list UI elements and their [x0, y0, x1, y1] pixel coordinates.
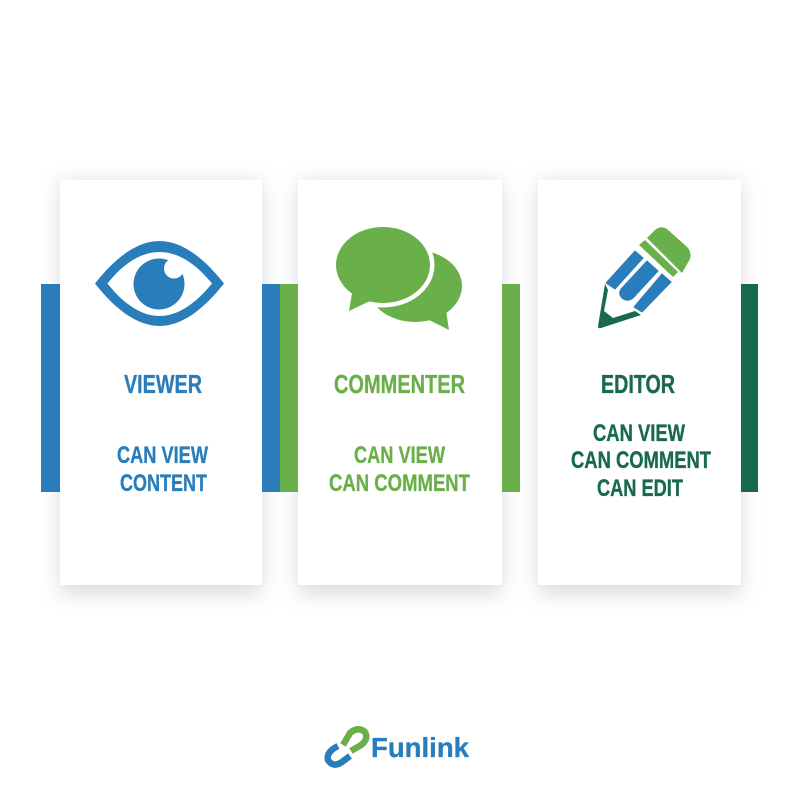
ribbon: viewer bar — [41, 284, 280, 492]
text: viewer permissions — [117, 442, 208, 497]
icon: eye — [95, 241, 224, 326]
text: viewer permissions: CAN VIEW — [117, 442, 208, 469]
text: commenter permissions: CAN VIEW — [354, 442, 445, 469]
heading: commenter: COMMENTER — [334, 369, 465, 399]
wordmark: Funlink — [371, 732, 469, 763]
text: commenter permissions — [329, 442, 470, 497]
text: editor permissions — [571, 420, 711, 502]
icon: pencil — [598, 227, 690, 328]
text: editor permissions: CAN EDIT — [597, 475, 683, 502]
ribbon: editor bar — [740, 284, 758, 492]
heading: editor: EDITOR — [601, 369, 675, 399]
text: editor permissions: CAN VIEW — [593, 420, 685, 447]
text: editor permissions: CAN COMMENT — [571, 447, 711, 474]
text: commenter permissions: CAN COMMENT — [329, 470, 470, 497]
panel: editor — [538, 180, 741, 585]
heading: viewer: VIEWER — [124, 369, 202, 399]
icon: speech bubbles — [332, 222, 462, 330]
ribbon: commenter bar — [280, 284, 520, 492]
icon: chain link — [328, 729, 366, 765]
panel: viewer — [60, 180, 262, 585]
text: viewer permissions: CONTENT — [120, 470, 207, 497]
panel: commenter — [298, 180, 502, 585]
logo: Funlink — [328, 729, 469, 765]
